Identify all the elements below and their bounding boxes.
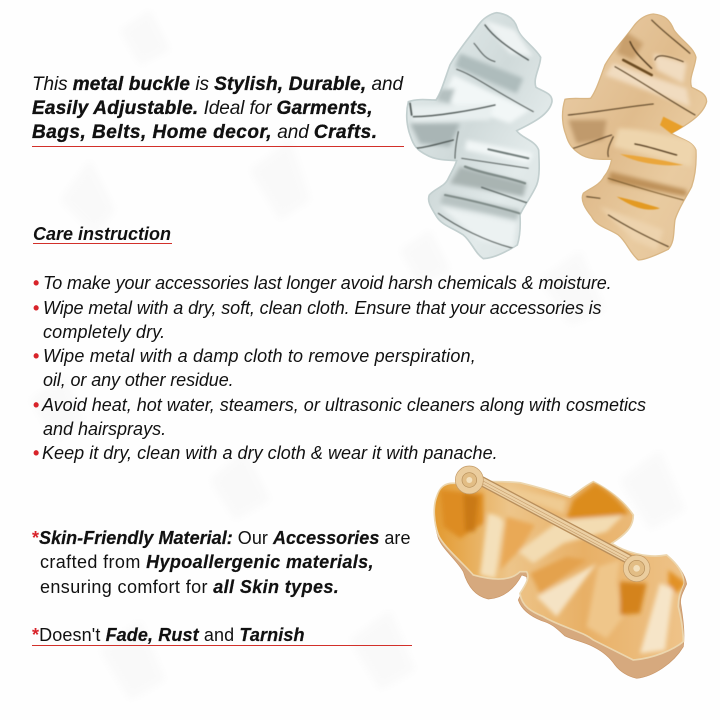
intro text [32,74,404,147]
care instruction list: • [33,395,39,415]
care instruction list: Avoid heat, hot water, steamers, or ultrasonic cleaners along with cosmetics [42,395,646,415]
intro text: This metal buckle is Stylish, Durable, and [32,74,403,95]
care instruction list: • [33,346,39,366]
skin-friendly note: crafted from Hypoallergenic materials, [40,552,374,572]
intro text: Bags, Belts, Home decor, and Crafts. [32,122,378,143]
icon: silver buckle [407,13,552,259]
care instruction list: • [33,298,39,318]
care instruction list: To make your accessories last longer avoid harsh chemicals & moisture. [43,273,612,293]
care instruction list: Wipe metal with a dry, soft, clean cloth. Ensure that your accessories is [43,298,601,318]
bar [470,475,633,562]
durability note: *Doesn't Fade, Rust and Tarnish [32,625,305,645]
icon: buckle back view [434,466,687,678]
skin-friendly note: *Skin-Friendly Material: Our Accessories are [32,528,410,548]
care instruction list: completely dry. [43,322,165,342]
skin-friendly note: ensuring comfort for all Skin types. [40,577,339,597]
skin-friendly note [32,528,410,598]
heading: care instruction: Care instruction [33,224,171,244]
care instruction list: and hairsprays. [43,419,166,439]
care instruction list: • [33,273,39,293]
care instruction list [33,273,646,463]
intro text: Easily Adjustable. Ideal for Garments, [32,98,373,119]
care instruction list: • [33,443,39,463]
care instruction list: oil, or any other residue. [43,370,234,390]
care instruction list: Wipe metal with a damp cloth to remove perspiration, [43,346,476,366]
care instruction list: Keep it dry, clean with a dry cloth & wear it with panache. [42,443,498,463]
icon: gold buckle [563,14,707,260]
